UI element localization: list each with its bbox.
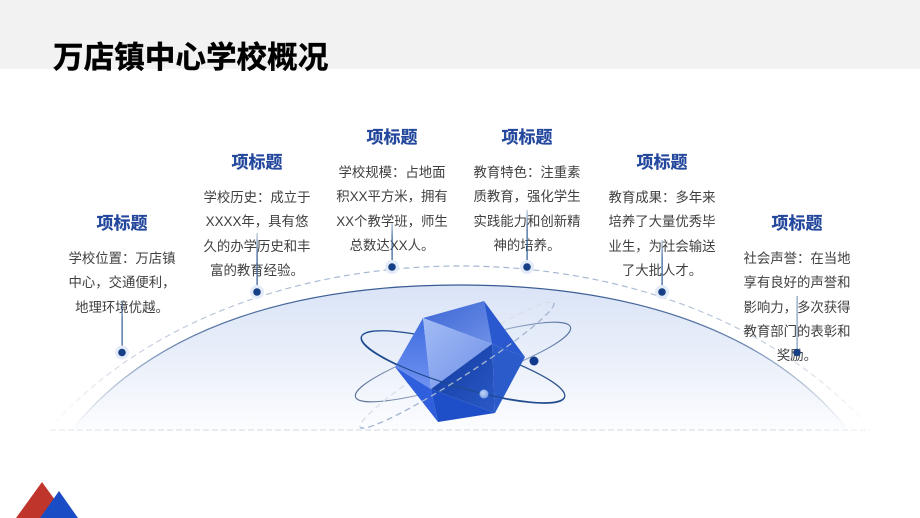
icon: blue crystal xyxy=(395,301,525,422)
item 5: 了大批人才。 xyxy=(622,263,702,278)
item 5: 项标题 xyxy=(636,153,688,172)
item 4: 质教育，强化学生 xyxy=(473,189,581,204)
item 2 xyxy=(203,153,311,278)
baseline xyxy=(50,429,870,431)
header band xyxy=(0,0,920,69)
dashed arc xyxy=(48,266,872,430)
item 5 xyxy=(608,153,716,278)
item 3: 项标题 xyxy=(366,128,418,147)
item 5: 业生，为社会输送 xyxy=(608,239,716,254)
item 3: 学校规模：占地面 xyxy=(338,165,446,180)
item 1: 中心，交通便利， xyxy=(68,275,176,290)
item 4: 神的培养。 xyxy=(494,238,560,253)
item 6: 社会声誉：在当地 xyxy=(743,251,851,266)
ball: dark xyxy=(530,356,538,366)
item 6: 奖励。 xyxy=(777,348,817,363)
marker 3 xyxy=(385,222,399,274)
item 2: 久的办学历史和丰 xyxy=(203,239,311,254)
item 4: 项标题 xyxy=(502,128,552,147)
item 2: XXXX年，具有悠 xyxy=(206,214,308,229)
dome xyxy=(72,285,848,430)
front orbit strokes xyxy=(360,303,565,428)
item 6: 项标题 xyxy=(772,214,822,233)
item 1 xyxy=(68,214,176,315)
title: 万店镇中心学校概况 xyxy=(53,41,328,75)
icon: logo triangles xyxy=(16,482,78,518)
item 2: 项标题 xyxy=(232,153,282,172)
item 2: 富的教育经验。 xyxy=(210,263,304,278)
item 3: 积XX平方米，拥有 xyxy=(336,189,448,204)
item 3: 总数达XX人。 xyxy=(350,238,434,253)
item 3 xyxy=(336,128,448,253)
item 1: 学校位置：万店镇 xyxy=(68,251,176,266)
ball: light xyxy=(480,390,488,398)
marker 1 xyxy=(115,300,129,360)
marker 2 xyxy=(250,233,264,299)
item 4: 教育特色：注重素 xyxy=(473,165,581,180)
back orbits xyxy=(349,292,577,438)
marker 5 xyxy=(655,240,669,299)
marker 4 xyxy=(520,210,534,274)
item 5: 教育成果：多年来 xyxy=(608,190,716,205)
item 5: 培养了大量优秀毕 xyxy=(608,214,716,229)
item 1: 地理环境优越。 xyxy=(75,300,169,315)
item 1: 项标题 xyxy=(96,214,148,233)
item 6: 享有良好的声誉和 xyxy=(743,275,851,290)
item 3: XX个教学班，师生 xyxy=(336,214,448,229)
item 4 xyxy=(473,128,581,253)
item 4: 实践能力和创新精 xyxy=(473,214,581,229)
item 2: 学校历史：成立于 xyxy=(203,190,311,205)
item 6: 教育部门的表彰和 xyxy=(743,324,851,339)
item 6 xyxy=(743,214,851,363)
marker 6 xyxy=(793,296,801,356)
item 6: 影响力，多次获得 xyxy=(743,300,851,315)
